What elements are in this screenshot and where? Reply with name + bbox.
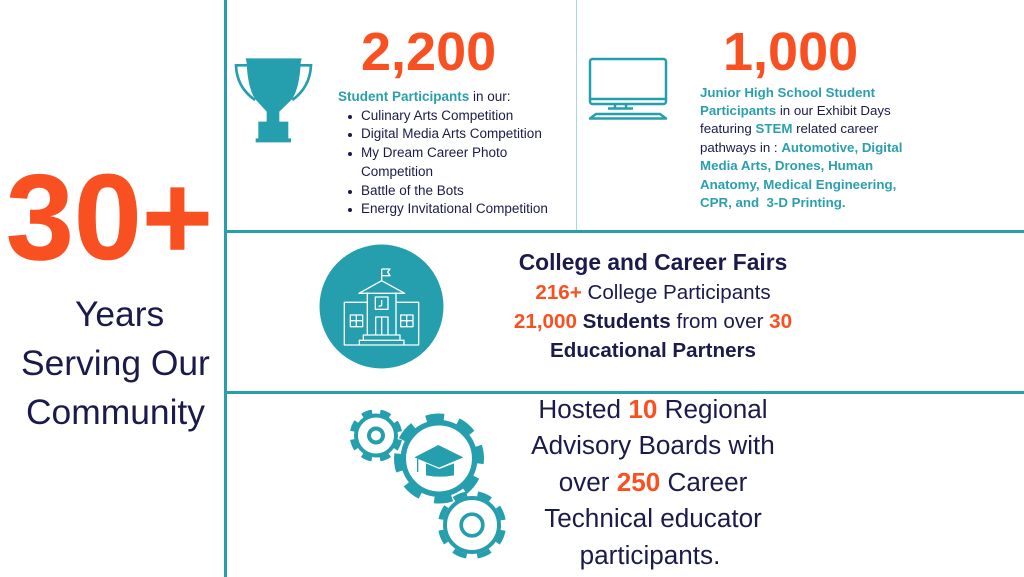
icon: school building in circle (320, 244, 444, 368)
panel: regional advisory boards (350, 394, 775, 570)
text: student participants list: My Dream Career Photo (361, 145, 507, 160)
text: junior high description: pathways in : Automotive, Digital (700, 140, 902, 155)
panel: junior high exhibit days (588, 22, 902, 210)
text: junior high description: featuring STEM related career (700, 121, 878, 136)
text: student participants list: Battle of the Bots (361, 183, 464, 198)
text: advisory boards description (531, 394, 775, 570)
text: fairs heading and stats: Educational Partners (550, 339, 756, 362)
stat: 1,000: 1,000 (723, 22, 858, 82)
text: advisory boards description: Advisory Boards with (531, 430, 775, 460)
text: junior high description: Anatomy, Medical Engineering, (700, 177, 896, 192)
text: fairs heading and stats: 21,000 Students from over 30 (514, 310, 792, 333)
text: advisory boards description: Technical educator (544, 503, 762, 533)
icon: desktop computer (588, 58, 668, 120)
text: advisory boards description: over 250 Career (559, 467, 747, 497)
text: student participants list: Student Participants in our: (338, 89, 511, 104)
headline number: 30+: 30+ (6, 149, 213, 285)
text: student participants list: Competition (361, 164, 433, 179)
text: student participants list (338, 89, 548, 216)
panel: 30+ years (6, 149, 213, 432)
text: junior high description: CPR, and 3-D Printing. (700, 195, 846, 210)
text: student participants list: Culinary Arts Competition (361, 108, 513, 123)
text: years serving our community: Years (75, 294, 164, 334)
text: junior high description (700, 84, 902, 210)
text: junior high description: Participants in our Exhibit Days (700, 103, 891, 118)
text: junior high description: Junior High School Student (700, 84, 875, 100)
panel: college and career fairs (320, 244, 792, 368)
text: junior high description: Media Arts, Drones, Human (700, 158, 873, 173)
text: years serving our community: Community (26, 392, 205, 432)
icon: gears with graduation cap (350, 410, 506, 558)
text: advisory boards description: participants. (580, 540, 720, 570)
text: years serving our community: Serving Our (21, 343, 210, 383)
stat: 2,200: 2,200 (361, 22, 496, 82)
text: advisory boards description: Hosted 10 Regional (538, 394, 768, 424)
text: fairs heading and stats: 216+ College Participants (535, 281, 771, 304)
text: student participants list: Energy Invitational Competition (361, 201, 548, 216)
text: fairs heading and stats (514, 249, 792, 362)
text: years serving our community (21, 294, 210, 432)
icon: trophy (234, 58, 312, 142)
text: fairs heading and stats: College and Career Fairs (519, 249, 787, 275)
panel: student competitions (234, 22, 548, 216)
text: student participants list: Digital Media Arts Competition (361, 126, 542, 141)
